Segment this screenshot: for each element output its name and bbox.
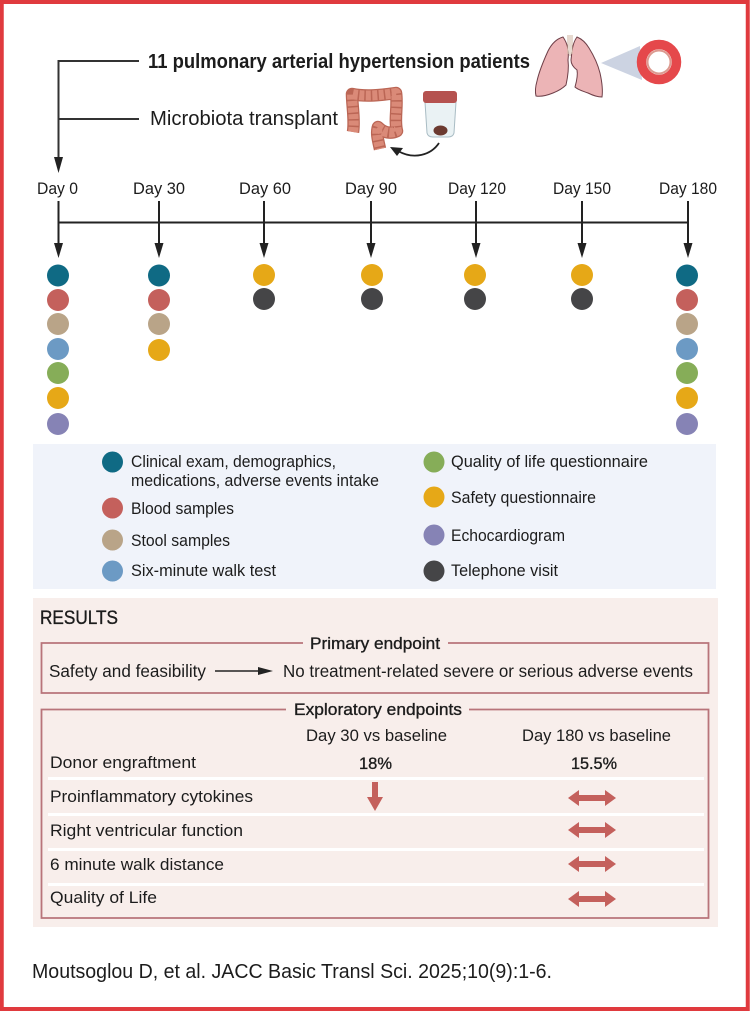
icon: colon [352, 93, 397, 149]
dots: Day 60 [253, 264, 275, 310]
row: donor engraftment: Donor engraftment [50, 753, 196, 772]
heading: results: RESULTS [40, 607, 118, 629]
legend: six-minute walk test: Six-minute walk test [131, 561, 276, 580]
dots: Day 90 [361, 264, 383, 310]
timeline labels: Day 0 [37, 180, 78, 198]
timeline labels: Day 60 [239, 180, 291, 198]
icon: lungs with vessel cross-section [535, 35, 676, 97]
panel: legend [33, 444, 716, 589]
dots: Day 150 [571, 264, 593, 310]
row: proinflammatory cytokines: Proinflammatory cytokines [50, 787, 253, 806]
box: exploratory endpoints: Day 30 vs baseline [306, 726, 447, 745]
box: primary endpoint: Primary endpoint [310, 634, 440, 653]
row: donor engraftment: 15.5% [571, 754, 617, 773]
legend: stool samples: Stool samples [131, 531, 230, 550]
legend: telephone visit [424, 560, 558, 582]
heading: patients: 11 pulmonary arterial hypertension patients [148, 51, 530, 73]
box: exploratory endpoints [42, 700, 708, 918]
row: right ventricular function: Right ventricular function [50, 821, 243, 840]
legend: clinical exam: medications, adverse events intake [131, 471, 379, 490]
row: quality of life: Quality of Life [50, 888, 157, 907]
legend: blood samples [102, 498, 234, 518]
dots: Day 180 [676, 264, 698, 435]
legend: echocardiogram: Echocardiogram [451, 526, 565, 545]
legend: telephone visit: Telephone visit [451, 561, 558, 580]
timeline axis [59, 222, 689, 224]
row: donor engraftment [50, 753, 617, 773]
row: 6 minute walk distance [50, 855, 616, 874]
timeline arrows [54, 201, 692, 258]
dots: Day 30 [148, 264, 170, 361]
legend: echocardiogram [424, 524, 565, 546]
legend: blood samples: Blood samples [131, 499, 234, 518]
box: exploratory endpoints: Day 180 vs baseline [522, 726, 671, 745]
legend: clinical exam [102, 452, 379, 490]
box: primary endpoint [42, 634, 708, 693]
citation: Moutsoglou D, et al. JACC Basic Transl Sci. 2025;10(9):1-6. [32, 961, 552, 983]
row: quality of life [50, 888, 616, 907]
timeline labels: Day 90 [345, 180, 397, 198]
row: donor engraftment: 18% [359, 754, 392, 773]
panel: results [33, 598, 718, 927]
dots: Day 120 [464, 264, 486, 310]
legend: quality of life: Quality of life questionnaire [451, 452, 648, 471]
timeline labels: Day 150 [553, 180, 611, 198]
icon: stool sample cup [423, 91, 457, 137]
box: primary endpoint: No treatment-related severe or serious adverse events [283, 661, 693, 681]
box: primary endpoint: Safety and feasibility [49, 661, 206, 681]
row: right ventricular function [50, 821, 616, 840]
timeline labels: Day 120 [448, 180, 506, 198]
dots: Day 0 [47, 264, 69, 435]
timeline labels: Day 30 [133, 180, 185, 198]
heading: microbiota transplant: Microbiota transplant [150, 108, 338, 130]
legend: safety questionnaire: Safety questionnaire [451, 488, 596, 507]
timeline labels [37, 180, 717, 198]
box: exploratory endpoints: Exploratory endpoints [294, 700, 462, 719]
arrow: cup to colon [390, 143, 439, 156]
row: proinflammatory cytokines [50, 782, 616, 811]
timeline labels: Day 180 [659, 180, 717, 198]
legend: clinical exam: Clinical exam, demographics, [131, 452, 336, 471]
row: 6 minute walk distance: 6 minute walk distance [50, 855, 224, 874]
legend: stool samples [102, 530, 230, 550]
flow lines from patients and transplant to Day 0 [54, 61, 139, 173]
